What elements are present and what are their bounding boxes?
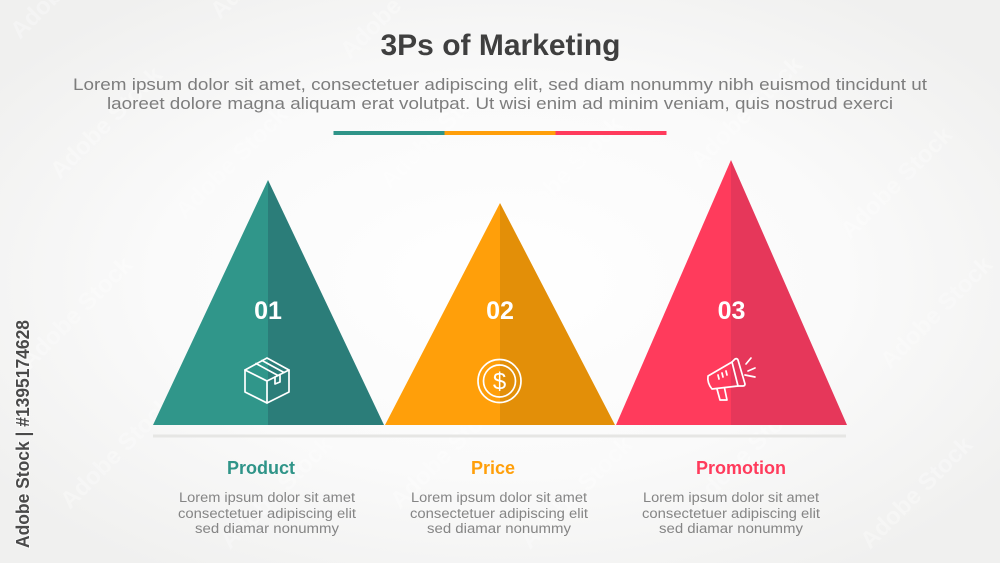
triangle 2: price (385, 203, 615, 425)
description: product: Lorem ipsum dolor sit amet (179, 490, 355, 505)
label: promotion (642, 458, 820, 536)
label: promotion: Promotion (696, 458, 786, 478)
text: Adobe Stock (685, 51, 808, 174)
label: product: Product (227, 458, 295, 478)
description: price (410, 490, 588, 536)
description: promotion: consectetuer adipiscing elit (642, 506, 820, 521)
number 02: 02 (486, 297, 514, 325)
text: Adobe Stock (375, 71, 498, 194)
text: Adobe Stock (385, 391, 508, 514)
baseline shadow (153, 434, 846, 438)
number 01: 01 (254, 297, 282, 325)
text: Adobe Stock (505, 111, 628, 234)
text: Adobe Stock (170, 101, 293, 224)
intro text (73, 75, 927, 113)
stock id side text: Adobe Stock | #1395174628 (13, 320, 33, 548)
intro text: Lorem ipsum dolor sit amet, consectetuer adipiscing elit, sed diam nonummy nibh euismod tincidunt ut (73, 75, 927, 94)
description: promotion (642, 490, 820, 536)
description: promotion: Lorem ipsum dolor sit amet (643, 490, 819, 505)
label: price: Price (471, 458, 515, 478)
triangle 3: promotion (616, 160, 847, 425)
triangle 1: product (153, 180, 384, 425)
text: Adobe Stock (45, 61, 168, 184)
title: 3Ps of Marketing (380, 29, 620, 62)
label: product (178, 458, 356, 536)
text: Adobe Stock (55, 391, 178, 514)
tricolor divider (334, 131, 666, 135)
text: Adobe Stock (685, 391, 808, 514)
description: product: sed diamar nonummy (195, 521, 339, 536)
label: price (410, 458, 588, 536)
text: Adobe Stock (15, 251, 138, 374)
description: product: consectetuer adipiscing elit (178, 506, 356, 521)
icon: megaphone (708, 358, 755, 400)
description: price: sed diamar nonummy (427, 521, 571, 536)
icon: box (245, 358, 289, 403)
number 03: 03 (718, 297, 745, 325)
text: Adobe Stock (835, 121, 958, 244)
icon: dollar coin (478, 360, 521, 402)
text: Adobe Stock (855, 431, 978, 554)
intro text: laoreet dolore magna aliquam erat volutpat. Ut wisi enim ad minim veniam, quis nostrud exerci (107, 94, 893, 113)
description: promotion: sed diamar nonummy (659, 521, 803, 536)
text: Adobe Stock (875, 251, 998, 374)
text: Adobe Stock (215, 431, 338, 554)
description: price: Lorem ipsum dolor sit amet (411, 490, 587, 505)
icon: dollar coin: $ (493, 368, 506, 396)
description: price: consectetuer adipiscing elit (410, 506, 588, 521)
description: product (178, 490, 356, 536)
text: Adobe Stock (515, 431, 638, 554)
